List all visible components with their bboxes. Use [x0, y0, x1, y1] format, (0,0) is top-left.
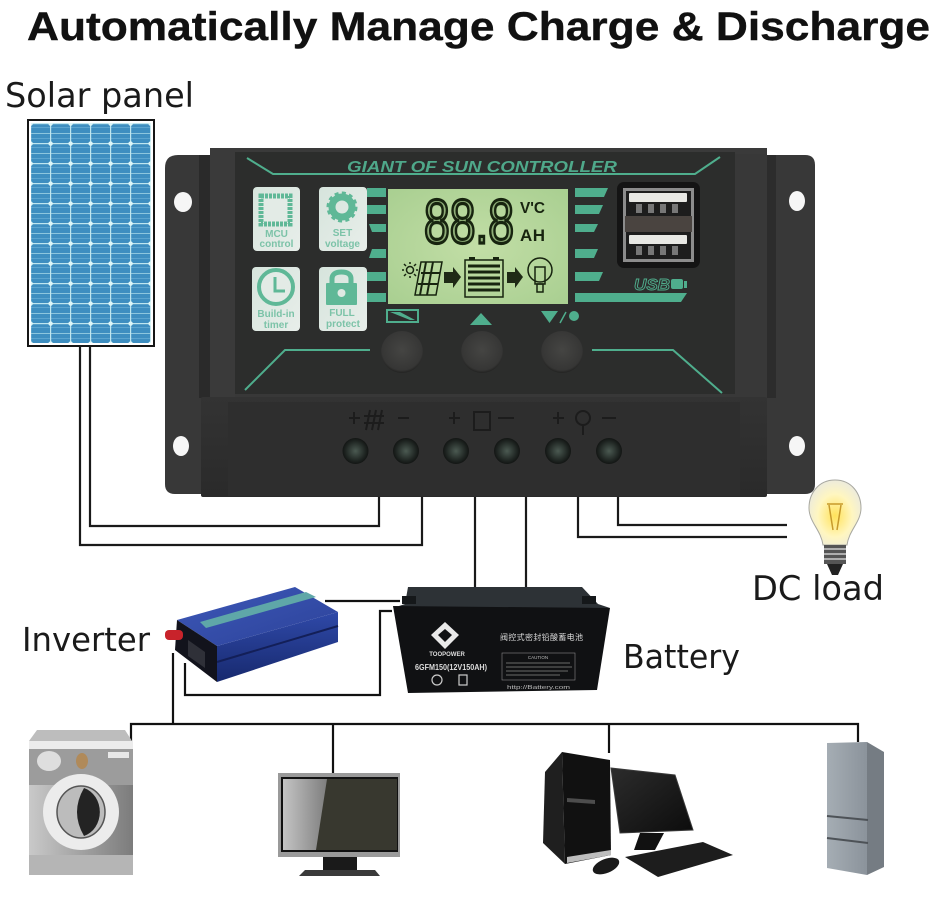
battery recycle marks — [432, 675, 467, 685]
faceplate accent lines — [245, 157, 722, 393]
battery terminals — [402, 596, 416, 604]
button symbols — [387, 310, 579, 325]
icon tile: build-in timer — [252, 267, 300, 331]
charge controller — [165, 148, 815, 497]
computer tower base strip — [567, 850, 611, 863]
appliance: desktop computer — [543, 752, 733, 878]
icon tile: SET voltage: voltage — [325, 239, 360, 250]
wiring: controller to DC load — [578, 495, 787, 537]
USB double port — [617, 182, 700, 268]
light bulb — [809, 480, 861, 575]
USB label: USB — [634, 277, 670, 294]
left ridge — [210, 148, 235, 398]
mounting holes — [173, 191, 805, 456]
inverter front — [175, 620, 217, 682]
battery brand: TOOPOWER — [429, 652, 465, 658]
computer monitor — [611, 768, 693, 833]
computer tower side — [543, 752, 565, 864]
flange groove right — [767, 155, 776, 398]
icon tile: build-in timer: timer — [264, 320, 288, 331]
battery logo — [431, 622, 459, 649]
LCD units lower: AH — [520, 226, 545, 245]
battery web address: http://Battery.com — [507, 685, 570, 691]
inverter side groove — [217, 626, 338, 662]
terminal block — [201, 397, 767, 497]
wiring: solar panel to controller — [80, 346, 422, 545]
icon tile: SET voltage: SET — [333, 228, 352, 239]
mouse — [590, 854, 622, 878]
icon tile: build-in timer: Build-in — [257, 309, 295, 320]
label: battery: Battery — [623, 637, 740, 676]
inverter display strip — [200, 592, 316, 628]
LCD bulb icon — [528, 258, 552, 292]
computer monitor stand — [634, 833, 664, 850]
icon tile: full protect: FULL — [329, 308, 355, 319]
icon tile: MCU control: control — [260, 239, 294, 250]
solar panel — [28, 120, 154, 346]
wiring: inverter to appliances — [131, 653, 858, 775]
left indicator bars — [367, 188, 386, 302]
LCD units: V'C — [520, 200, 545, 217]
battery body — [393, 606, 610, 693]
icon tile: MCU control — [253, 187, 300, 251]
computer tower front — [562, 752, 611, 864]
flange groove left — [199, 155, 210, 398]
inverter top — [177, 587, 338, 646]
label: inverter: Inverter — [22, 620, 150, 659]
battery caution box — [502, 653, 575, 680]
LCD arrow two — [507, 267, 523, 288]
computer tower drive slot — [567, 798, 595, 804]
appliance: refrigerator — [827, 742, 884, 875]
label: DC load: DC load — [752, 569, 884, 608]
label: solar panel: Solar panel — [5, 76, 194, 115]
inverter red terminal — [165, 630, 183, 640]
terminal screws — [342, 438, 622, 464]
top ridge — [210, 148, 767, 154]
control buttons — [381, 331, 583, 373]
brand heading: GIANT OF SUN CONTROLLER — [347, 159, 618, 176]
LCD arrow one — [444, 267, 461, 288]
LCD digits: 88.8 — [424, 188, 514, 257]
faceplate — [235, 152, 735, 394]
inverter socket — [188, 640, 205, 668]
appliance: monitor — [278, 773, 400, 876]
battery — [393, 587, 610, 693]
wiring: controller to battery — [475, 495, 526, 587]
battery model: 6GFM150(12V150AH) — [415, 663, 487, 672]
LCD battery icon — [465, 257, 503, 297]
appliance: washing machine — [29, 730, 133, 875]
USB label — [634, 277, 687, 294]
icon tile: SET voltage — [319, 187, 367, 251]
mounting flanges — [165, 155, 815, 494]
icon tile: MCU control: MCU — [265, 229, 288, 240]
battery lid — [393, 587, 610, 608]
wiring: inverter to battery — [185, 601, 400, 695]
inverter side — [217, 612, 338, 682]
LCD sun icon — [402, 262, 418, 278]
icon tile: full protect: protect — [326, 319, 361, 330]
battery chinese label: 阀控式密封铅酸蓄电池 — [500, 632, 583, 642]
right ridge — [735, 148, 767, 398]
inverter — [165, 587, 338, 682]
battery caution box: CAUTION — [528, 655, 548, 660]
LCD screen — [388, 188, 568, 304]
LCD solar array icon — [415, 262, 442, 295]
icon tile: full protect — [319, 267, 367, 331]
title: Automatically Manage Charge & Discharge — [27, 5, 930, 49]
terminal polarity markings — [349, 410, 616, 435]
right indicator bars — [575, 188, 687, 302]
keyboard — [625, 842, 733, 877]
